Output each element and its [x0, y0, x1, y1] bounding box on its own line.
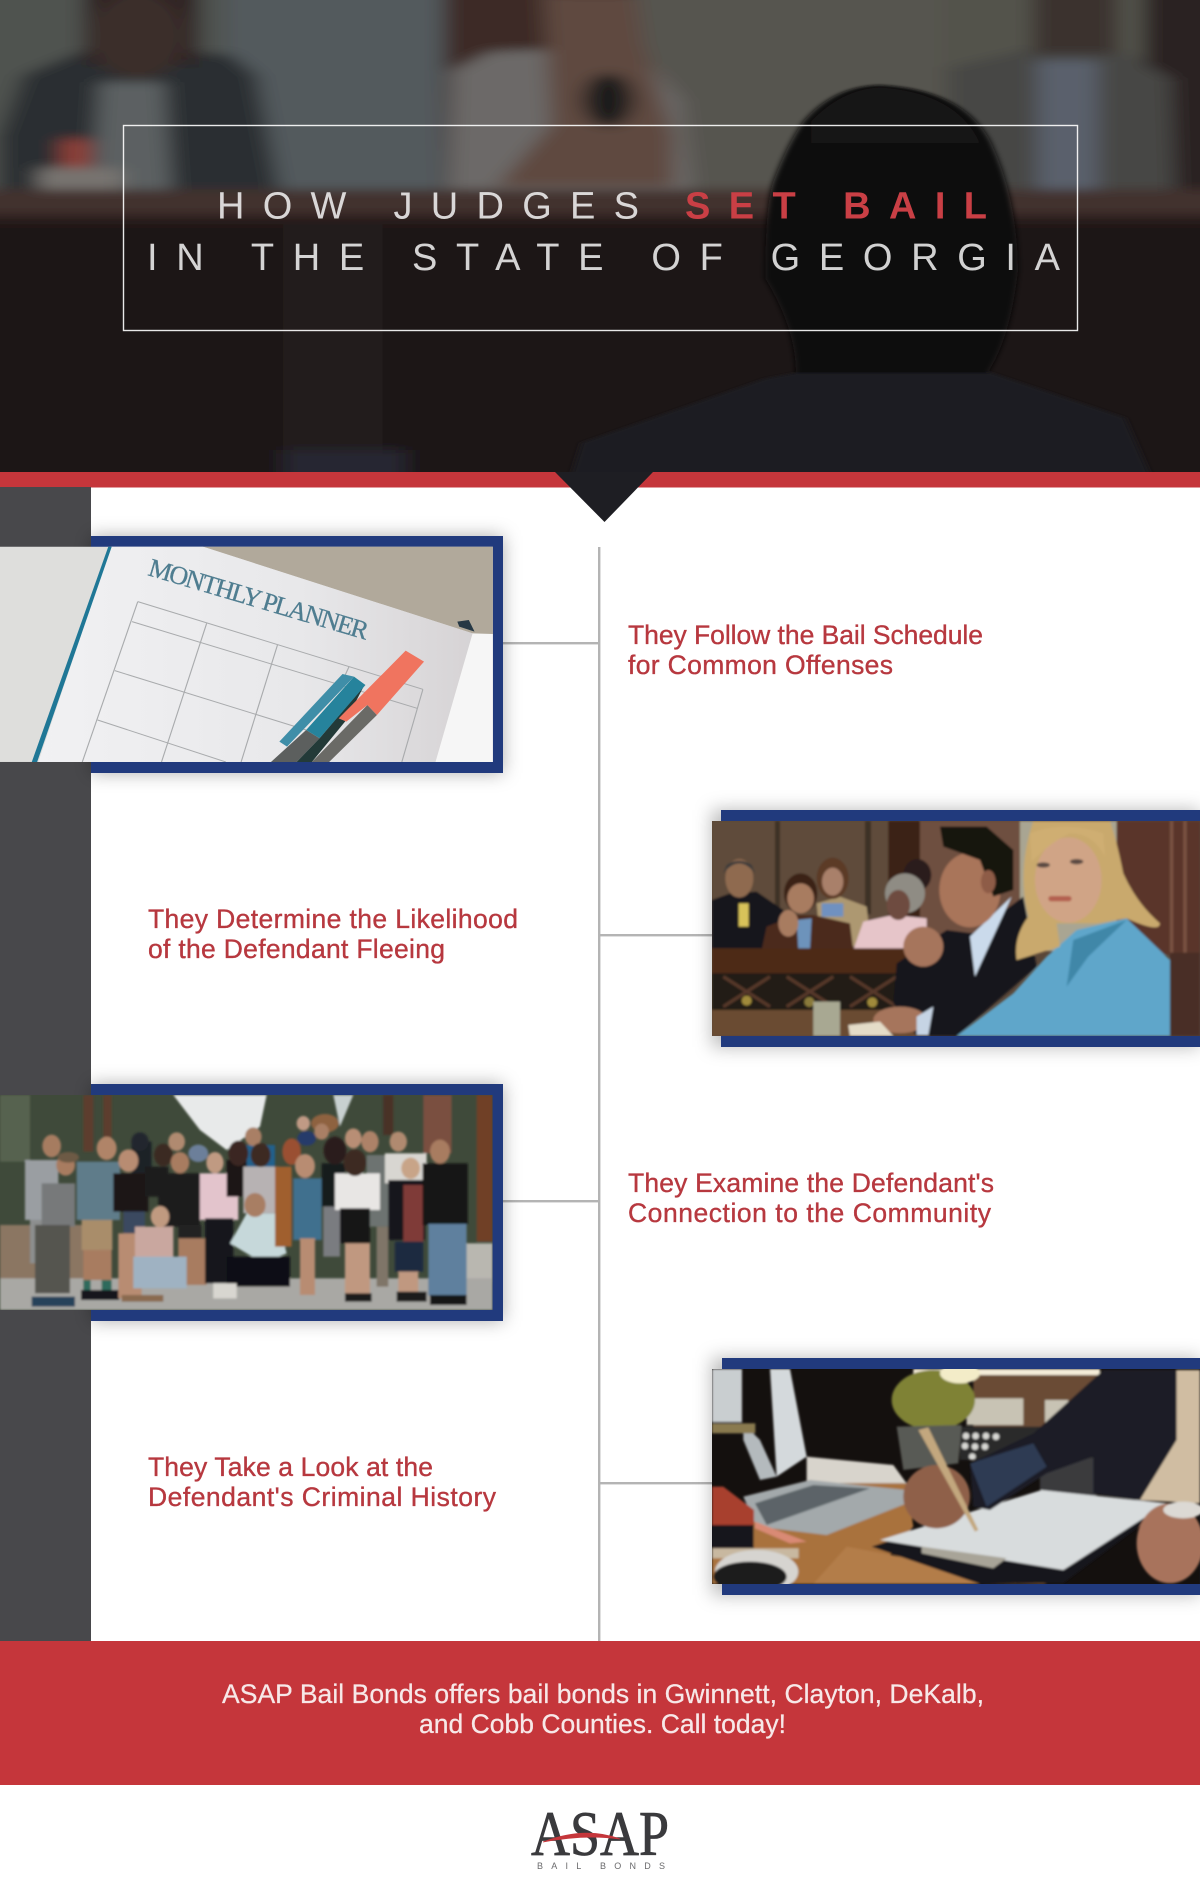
kid in tank [42, 1183, 75, 1227]
text: step 1: for Common Offenses [628, 650, 893, 680]
white tee [335, 1173, 380, 1210]
dark sidebar [0, 487, 91, 1641]
logo: ASAP Bail Bonds: BAIL BONDS [537, 1861, 665, 1871]
panel: courtroom photo [712, 810, 1200, 1047]
text: step 2: of the Defendant Fleeing [148, 934, 445, 964]
pink tee [200, 1173, 238, 1220]
cardigan and denim [275, 1167, 292, 1247]
text: step 2: They Determine the Likelihood [148, 904, 518, 934]
red divider band [0, 472, 1200, 488]
title frame and heading: IN THE STATE OF GEORGIA [147, 237, 1061, 279]
text: step 3: They Examine the Defendant's [628, 1168, 994, 1198]
logo: ASAP Bail Bonds: ASAP [531, 1798, 669, 1869]
kid in hoodie [388, 1180, 425, 1240]
panel: planner photo: MONTHLY PLANNER [145, 553, 373, 646]
title frame and heading [124, 126, 1078, 330]
footer call-to-action band: ASAP Bail Bonds offers bail bonds in Gwinnett, Clayton, DeKalb, [222, 1679, 984, 1709]
panel: signing document photo [712, 1358, 1200, 1595]
text: step 3: Connection to the Community [628, 1198, 992, 1228]
back row [132, 1142, 152, 1173]
panel: community group photo [0, 1084, 503, 1321]
text: step 4 [148, 1452, 497, 1512]
grey tee [243, 1167, 278, 1213]
girl with black tee [145, 1167, 168, 1197]
crouching center [230, 1213, 287, 1263]
panel: planner photo [0, 536, 503, 773]
text: step 2 [148, 904, 518, 964]
man in blue tee [77, 1162, 120, 1220]
pointer triangle [555, 472, 653, 522]
right man [423, 1163, 468, 1225]
footer call-to-action band [0, 1641, 1200, 1785]
central timeline connector lines [503, 547, 712, 1641]
text: step 1 [628, 620, 983, 680]
title frame and heading: HOW JUDGES [217, 186, 639, 228]
text: step 4: Defendant's Criminal History [148, 1482, 497, 1512]
crouching left [135, 1227, 173, 1263]
footer call-to-action band: and Cobb Counties. Call today! [419, 1709, 786, 1739]
text: step 4: They Take a Look at the [148, 1452, 433, 1482]
title frame and heading: SET BAIL [685, 186, 987, 228]
text: step 1: They Follow the Bail Schedule [628, 620, 983, 650]
woman in black top [113, 1173, 148, 1212]
text: step 3 [628, 1168, 994, 1228]
hero panel: blurred courtroom photograph [0, 0, 1200, 495]
